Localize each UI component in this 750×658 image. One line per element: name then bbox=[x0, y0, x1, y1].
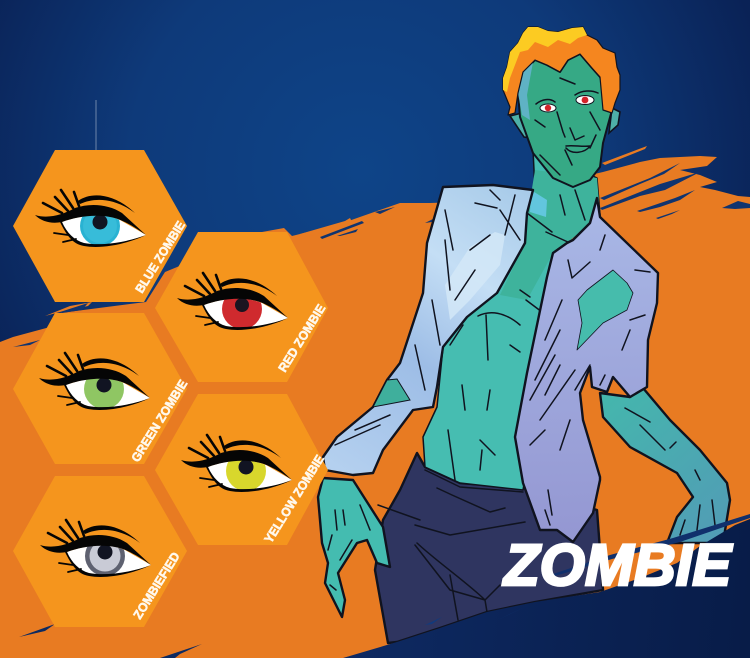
eye: left bbox=[540, 104, 556, 112]
illustration: zombie figure bbox=[318, 27, 730, 643]
orange streaks bbox=[602, 146, 647, 165]
right arm and hand bbox=[600, 388, 730, 543]
eye: right bbox=[576, 96, 594, 104]
shirt left panel bbox=[323, 185, 533, 475]
icon: red eye bbox=[177, 273, 288, 330]
torso and neck bbox=[423, 150, 600, 490]
forearm tear bbox=[373, 379, 410, 407]
icon: blue eye bbox=[35, 190, 146, 247]
hair bbox=[503, 27, 620, 115]
ears bbox=[510, 108, 620, 138]
shirt tear: chest patch bbox=[577, 270, 633, 350]
hanging thread bbox=[95, 100, 97, 150]
label: green zombie: GREEN ZOMBIE bbox=[129, 377, 190, 465]
icon: yellow eye bbox=[181, 435, 292, 492]
icon: green eye bbox=[39, 353, 150, 410]
label: red zombie: RED ZOMBIE bbox=[276, 302, 328, 375]
trousers bbox=[375, 453, 603, 643]
panel: yellow zombie hexagon bbox=[155, 394, 328, 546]
left hand bbox=[318, 478, 390, 617]
orange brush stroke bbox=[0, 146, 750, 658]
label: zombified: ZOMBIEFIED bbox=[131, 550, 183, 622]
title: ZOMBIE bbox=[502, 533, 733, 598]
shirt right panel bbox=[515, 198, 658, 542]
panel: red zombie hexagon bbox=[155, 232, 328, 382]
icon: grey eye bbox=[40, 520, 151, 577]
navy streak through title bbox=[553, 514, 750, 576]
navy streaks over orange bbox=[600, 163, 680, 200]
label: yellow zombie: YELLOW ZOMBIE bbox=[262, 453, 327, 546]
panel: zombified hexagon bbox=[13, 476, 187, 627]
facial lines bbox=[535, 78, 600, 175]
navy area: bottom right wedge bbox=[343, 514, 750, 658]
face bbox=[518, 54, 612, 187]
label: blue zombie: BLUE ZOMBIE bbox=[133, 219, 188, 296]
panel: blue zombie hexagon bbox=[13, 150, 188, 302]
panel: green zombie hexagon bbox=[13, 313, 190, 465]
